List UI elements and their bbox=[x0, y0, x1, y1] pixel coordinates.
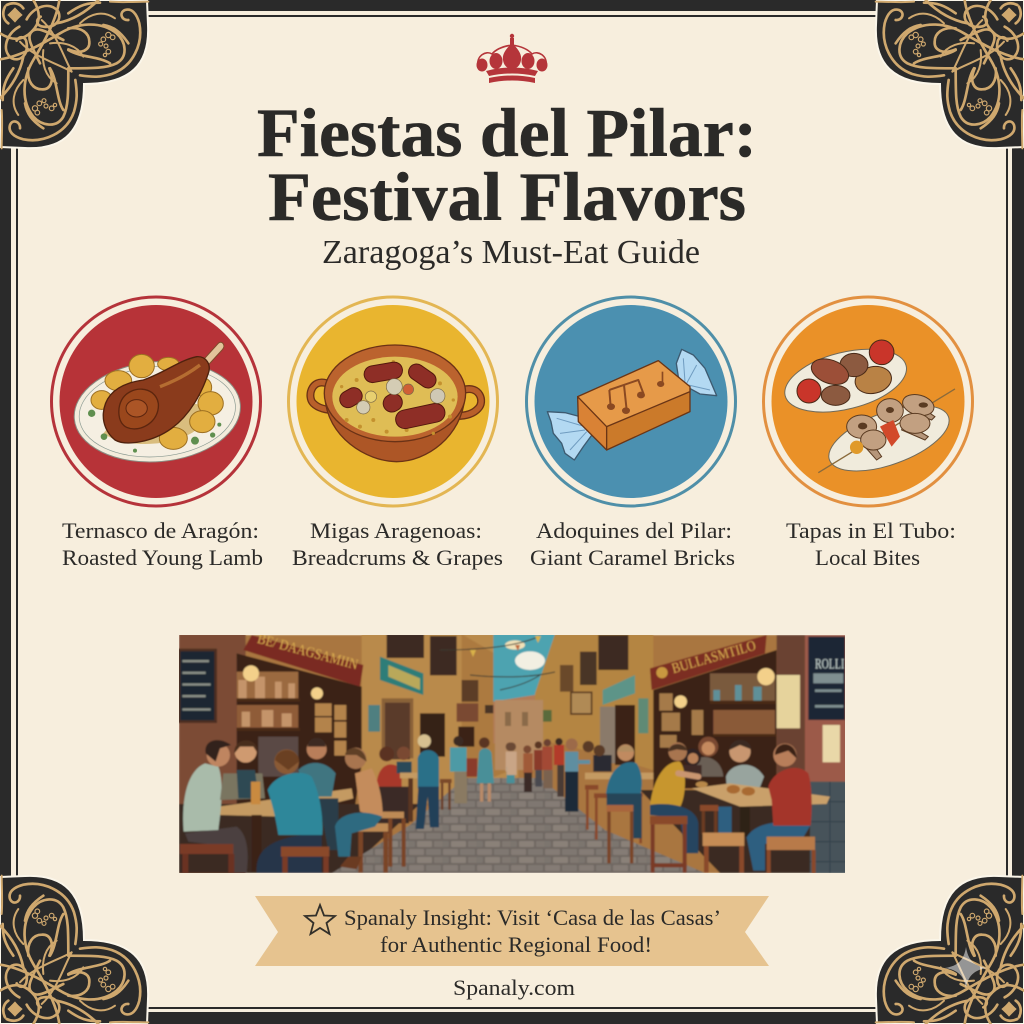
standing man in doorway bbox=[565, 752, 578, 773]
panel: Migas Aragenoas bbox=[288, 297, 503, 570]
yellow circle badge bbox=[288, 297, 498, 506]
man in yellow bbox=[650, 762, 685, 807]
panel: Tapas in El Tubo bbox=[764, 297, 972, 570]
man in tan shirt bbox=[355, 768, 383, 818]
red woman and companion bbox=[377, 764, 402, 788]
cobbled street bbox=[332, 778, 705, 873]
corner ornament: bottom right bbox=[876, 876, 1024, 1024]
icon: roast lamb on plate bbox=[70, 342, 245, 469]
illustration: El Tubo street scene bbox=[179, 631, 847, 874]
subtitle: Zaragoga’s Must-Eat Guide bbox=[322, 234, 700, 271]
title: Festival Flavors bbox=[268, 159, 746, 235]
far table and stools bbox=[585, 773, 653, 779]
orange circle badge bbox=[764, 297, 972, 506]
left facades bbox=[179, 631, 518, 874]
callout ribbon: Spanaly Insight bbox=[255, 896, 769, 966]
title: Fiestas del Pilar: bbox=[257, 95, 757, 171]
table and stools bbox=[357, 823, 388, 832]
label: Tapas in El Tubo: Local Bites bbox=[815, 545, 920, 570]
icon: star bbox=[305, 905, 335, 934]
footer: website: Spanaly.com bbox=[453, 975, 575, 1000]
bunting strings bbox=[456, 636, 556, 691]
women at back of bar bbox=[695, 757, 723, 777]
label: Ternasco de Aragón: Ternasco de Aragón: bbox=[62, 518, 259, 543]
icon: clay pot of migas bbox=[310, 345, 481, 462]
label: Migas Aragenoas: Breadcrums & Grapes bbox=[292, 545, 503, 570]
panel: Ternasco de Aragón bbox=[52, 297, 263, 570]
right facades: ROLLI bbox=[815, 656, 844, 672]
sign bbox=[243, 635, 363, 687]
callout text: Spanaly Insight: Visit ‘Casa de las Casas’ bbox=[344, 905, 721, 930]
watermark sparkle bbox=[945, 947, 987, 988]
label: Tapas in El Tubo: Tapas in El Tubo: bbox=[786, 518, 956, 543]
icon: crown bbox=[476, 34, 548, 83]
teal sign and doors bbox=[380, 657, 423, 695]
man in grey bbox=[726, 765, 764, 787]
far street buildings bbox=[495, 700, 543, 770]
man in red bbox=[747, 822, 811, 871]
woman laughing bbox=[220, 773, 265, 800]
label: Adoquines del Pilar: Giant Caramel Bricks bbox=[530, 545, 735, 570]
corner ornament: bottom left bbox=[0, 876, 148, 1024]
seated man in pale shirt bbox=[185, 827, 248, 873]
label: Migas Aragenoas: Migas Aragenoas: bbox=[310, 518, 482, 543]
man in teal bbox=[298, 763, 336, 797]
right facades: BULLASMTILO bbox=[670, 638, 758, 677]
front stools bbox=[650, 816, 687, 824]
blue circle badge bbox=[526, 297, 736, 506]
street crowd bbox=[507, 738, 564, 797]
callout text: for Authentic Regional Food! bbox=[380, 932, 652, 957]
shaded floor under tables bbox=[179, 804, 420, 873]
label: Ternasco de Aragón: Roasted Young Lamb bbox=[62, 545, 263, 570]
panel: Adoquines del Pilar bbox=[526, 297, 736, 570]
man in blue bbox=[606, 762, 642, 794]
label: Adoquines del Pilar: Adoquines del Pilar: bbox=[536, 518, 732, 543]
man from behind in blue bbox=[257, 833, 322, 873]
front stools bbox=[180, 844, 233, 854]
icon: tapas plates and skewer bbox=[778, 338, 957, 484]
corner ornament: top left bbox=[0, 0, 148, 148]
right side people and tables bbox=[507, 737, 830, 873]
left facades: BE/ DAAGSAMIIN bbox=[256, 631, 360, 673]
left side people and tables bbox=[180, 734, 516, 873]
standing man bbox=[418, 750, 439, 788]
red circle badge bbox=[52, 297, 260, 506]
right facades bbox=[493, 634, 847, 873]
icon: wrapped caramel brick bbox=[547, 349, 717, 460]
corner ornament: top right bbox=[876, 0, 1024, 148]
bar table with food bbox=[692, 783, 830, 807]
